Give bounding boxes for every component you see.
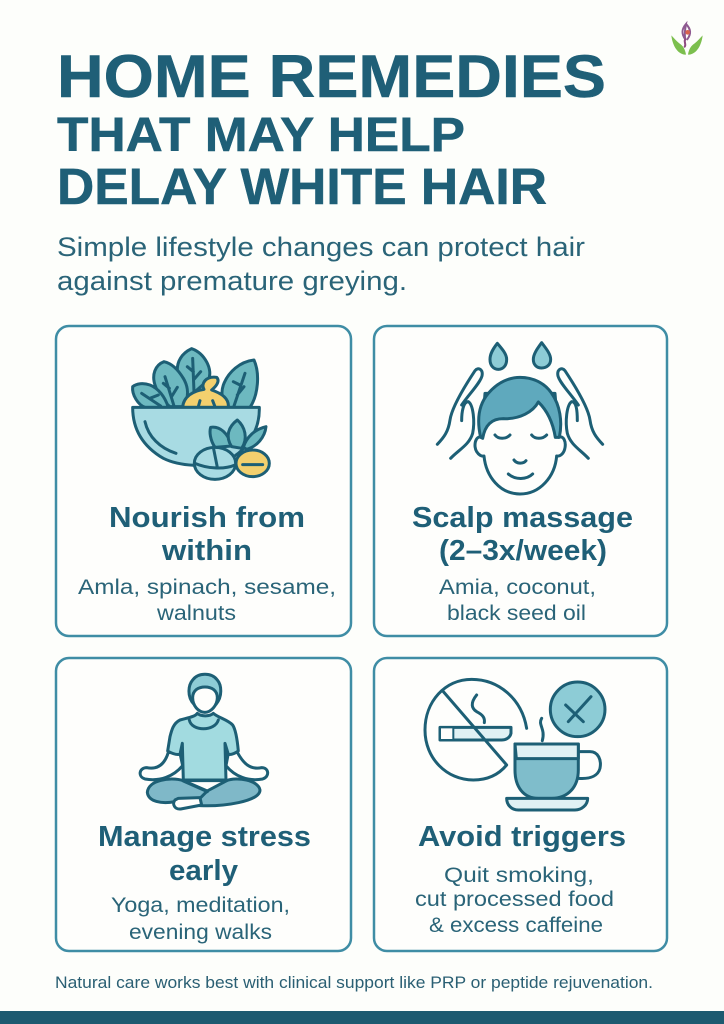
coffee cup [507,718,600,810]
heading [412,502,633,567]
body text: Amla, spinach, sesame, [78,576,336,599]
bottom bar [0,1011,724,1024]
body text: cut processed food [415,888,614,911]
body text [415,864,614,937]
title: HOME REMEDIES [57,43,606,110]
title: THAT MAY HELP [57,109,465,162]
footer note: Natural care works best with clinical support like PRP or peptide rejuvenation. [55,973,653,992]
heading [98,821,311,887]
icon: head massage with oil drops [437,343,603,494]
icon: no smoking, cross badge and coffee cup [425,679,605,810]
body text: evening walks [129,921,272,944]
heading [109,502,305,567]
subtitle: Simple lifestyle changes can protect hair [57,232,585,262]
heading: Scalp massage [412,502,633,534]
heading: Manage stress [98,821,311,853]
cross badge [550,682,605,737]
logo [671,24,703,55]
subtitle: against premature greying. [57,266,407,296]
heading: within [161,535,252,567]
heading: Nourish from [109,502,305,534]
body text: & excess caffeine [429,914,603,937]
body text [78,576,336,625]
body text [439,576,596,625]
title [57,43,606,215]
body text: Yoga, meditation, [111,894,290,917]
panel: manage stress [56,658,351,951]
icon: bowl of greens [133,349,269,479]
icon: meditating person [140,674,268,809]
body text: walnuts [156,602,236,625]
heading: (2–3x/week) [439,535,607,567]
heading: Avoid triggers [418,821,626,853]
body text: black seed oil [447,602,586,625]
no-smoking sign [425,679,527,780]
body text: Amia, coconut, [439,576,596,599]
subtitle [57,232,585,296]
body text [111,894,290,944]
body text: Quit smoking, [444,864,594,887]
panel: scalp massage [374,326,667,636]
panel: avoid triggers [374,658,667,951]
title: DELAY WHITE HAIR [57,158,547,215]
panel: nourish from within [56,326,351,636]
heading: early [169,855,238,887]
